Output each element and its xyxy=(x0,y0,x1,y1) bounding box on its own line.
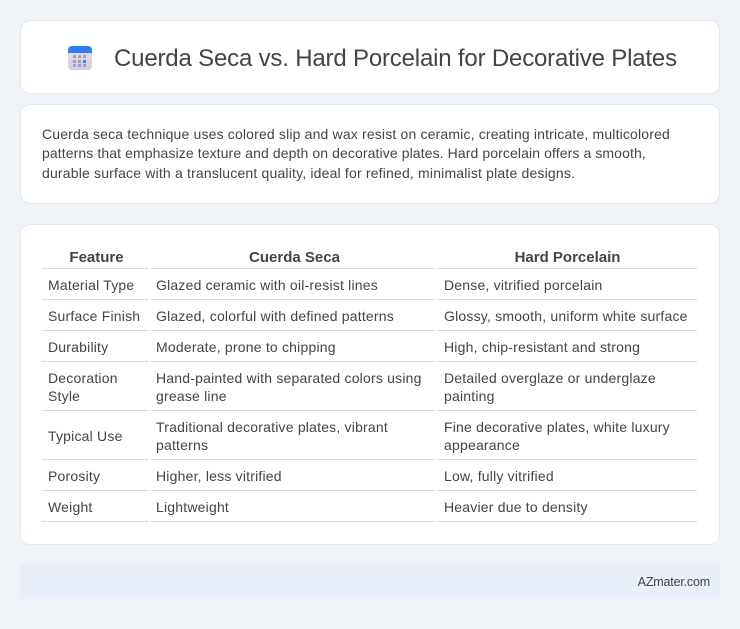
table: comparison: Higher, less vitrified xyxy=(156,468,282,484)
table: comparison: Style xyxy=(48,388,80,404)
table: comparison: patterns xyxy=(156,437,208,453)
footer bar xyxy=(20,565,720,599)
icon: calendar xyxy=(68,46,92,70)
table: comparison: Glossy, smooth, uniform white surface xyxy=(444,308,688,324)
text: patterns that emphasize texture and depth on decorative plates. Hard porcelain offers a smooth, xyxy=(42,145,646,161)
table: comparison: Weight xyxy=(48,499,93,515)
table: comparison: Durability xyxy=(48,339,108,355)
table: comparison: Fine decorative plates, white luxury xyxy=(444,419,670,435)
panel: title header xyxy=(20,20,720,94)
table: comparison: Dense, vitrified porcelain xyxy=(444,277,602,293)
footer credit: AZmater.com xyxy=(638,575,710,589)
table: comparison: Porosity xyxy=(48,468,100,484)
table: comparison: Detailed overglaze or underglaze xyxy=(444,370,656,386)
table: comparison: High, chip-resistant and strong xyxy=(444,339,640,355)
panel: comparison table xyxy=(20,224,720,545)
table: comparison: Glazed, colorful with defined patterns xyxy=(156,308,394,324)
table: comparison: grease line xyxy=(156,388,227,404)
table: comparison: Lightweight xyxy=(156,499,229,515)
table: comparison: Traditional decorative plates, vibrant xyxy=(156,419,388,435)
table: comparison: Material Type xyxy=(48,277,134,293)
table: comparison: appearance xyxy=(444,437,520,453)
table: comparison: Glazed ceramic with oil-resist lines xyxy=(156,277,378,293)
text: durable surface with a translucent quality, ideal for refined, minimalist plate designs. xyxy=(42,165,575,181)
table: comparison: Low, fully vitrified xyxy=(444,468,554,484)
table: comparison: Hand-painted with separated colors using xyxy=(156,370,422,386)
table: comparison: Cuerda Seca xyxy=(249,249,340,266)
table: comparison: Moderate, prone to chipping xyxy=(156,339,336,355)
table: comparison xyxy=(42,249,697,522)
table: comparison: Surface Finish xyxy=(48,308,140,324)
text: Cuerda seca technique uses colored slip and wax resist on ceramic, creating intricate, multicolored xyxy=(42,126,670,142)
table: comparison: Typical Use xyxy=(48,428,123,444)
table: comparison: Feature xyxy=(69,249,124,266)
title: Cuerda Seca vs. Hard Porcelain for Decorative Plates xyxy=(114,45,677,72)
table: comparison: Decoration xyxy=(48,370,118,386)
panel: intro text xyxy=(20,104,720,204)
table: comparison: painting xyxy=(444,388,495,404)
table: comparison: Heavier due to density xyxy=(444,499,588,515)
table: comparison: Hard Porcelain xyxy=(515,249,620,266)
intro paragraph xyxy=(42,126,670,181)
